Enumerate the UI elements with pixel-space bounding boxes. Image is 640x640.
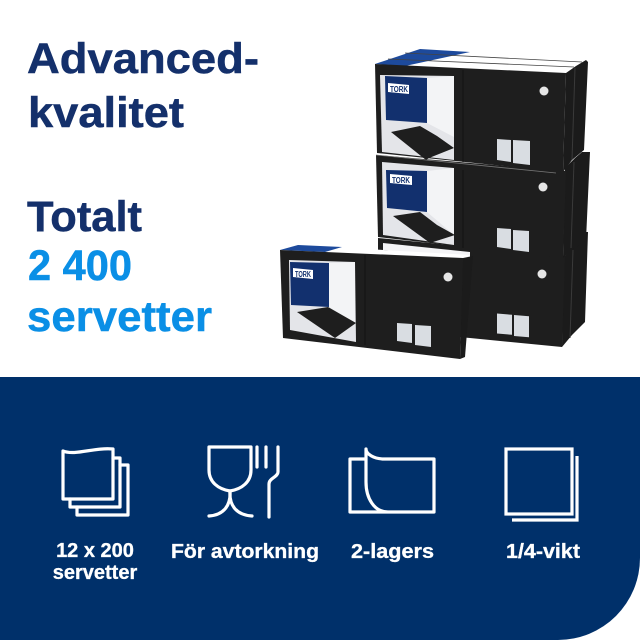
box: top row	[375, 49, 588, 172]
icon: two-ply sheet	[350, 449, 434, 512]
box: bottom row back	[378, 232, 588, 347]
packaging panel: TORK	[392, 176, 410, 185]
heading: 2 400 servetter: 2 400	[28, 242, 132, 290]
box: middle row	[376, 152, 590, 258]
packaging panel	[289, 260, 356, 342]
heading: Advanced-kvalitet: kvalitet	[28, 89, 184, 137]
label: 2-lagers: 2-lagers	[351, 541, 434, 563]
heading: 2 400 servetter	[27, 242, 212, 341]
heading: Totalt: Totalt	[27, 193, 142, 241]
heading: 2 400 servetter: servetter	[27, 293, 212, 341]
label: För avtorkning: För avtorkning	[171, 541, 319, 563]
packaging panel: TORK	[390, 85, 408, 94]
packaging panel	[382, 162, 455, 245]
icon: quarter fold	[506, 449, 577, 520]
panel: navy footer	[0, 377, 640, 640]
label: 12 x 200 servetter: 12 x 200	[56, 540, 134, 562]
icon: stacked napkins	[63, 449, 128, 515]
product stack	[280, 49, 590, 359]
packaging panel	[380, 75, 454, 160]
label: 12 x 200 servetter: servetter	[53, 562, 137, 584]
heading: Advanced-kvalitet	[27, 35, 259, 137]
icon: glass and fork	[209, 447, 278, 517]
label: 1/4-vikt: 1/4-vikt	[506, 541, 580, 563]
label: 12 x 200 servetter	[53, 540, 137, 584]
packaging panel: TORK	[295, 270, 311, 279]
heading: Advanced-kvalitet: Advanced-	[27, 35, 259, 83]
box: front	[280, 245, 473, 359]
